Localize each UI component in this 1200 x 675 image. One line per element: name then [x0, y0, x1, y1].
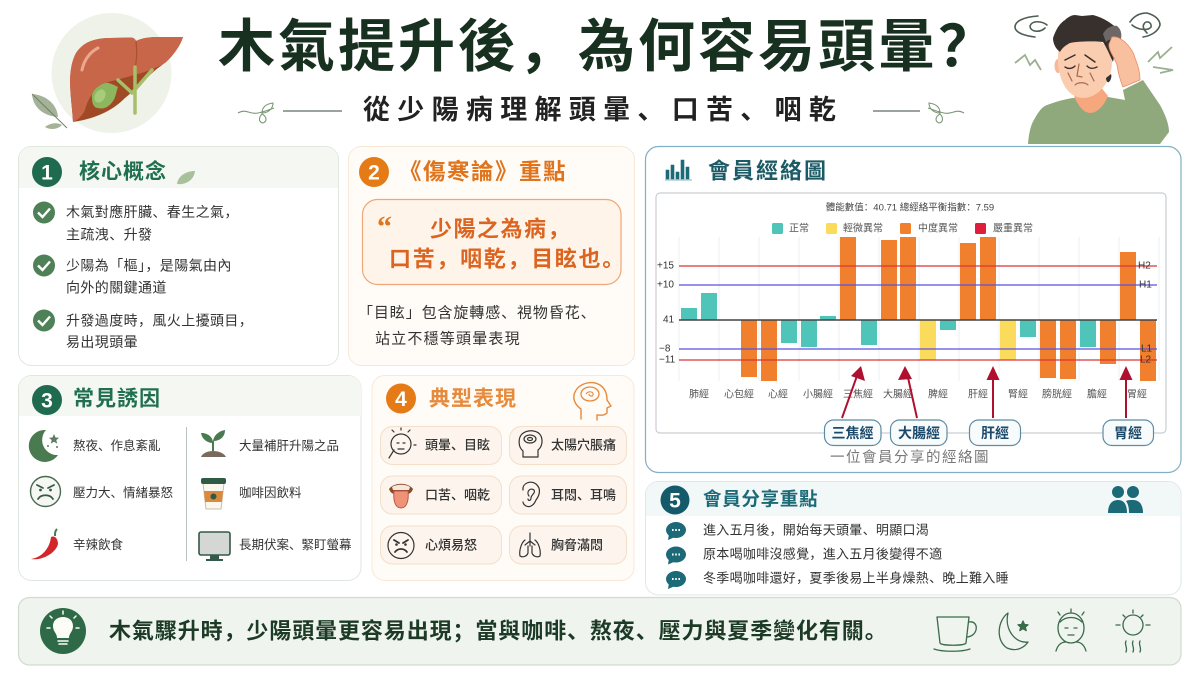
callout: stomach meridian [1103, 420, 1154, 446]
chart legend: 輕微異常 [843, 222, 883, 234]
quote box [362, 200, 626, 284]
heading: Shanghan Lun [359, 157, 567, 187]
trigger: long desk and screen time [199, 532, 352, 561]
trigger: spicy food [31, 529, 124, 559]
title: 木氣提升後，為何容易頭暈？ [218, 15, 998, 79]
point 3: 易出現頭暈 [66, 334, 138, 350]
axis labels: +10 [657, 280, 674, 290]
arrow: sanjiao meridian [842, 366, 865, 418]
note on dizziness: 「目眩」包含旋轉感、視物昏花、 [358, 304, 597, 322]
point 2 [33, 254, 232, 296]
point 1 [33, 202, 239, 242]
trigger: stress and anger [30, 476, 174, 506]
trigger: spicy food: 辛辣飲食 [73, 537, 124, 552]
panel 4: typical symptoms [372, 376, 634, 580]
axis labels: L2 [1140, 354, 1152, 366]
meridian labels: 大腸經 [883, 388, 913, 400]
heading: typical symptoms: 典型表現 [429, 388, 517, 410]
chart legend [772, 222, 1033, 234]
trigger: liver-raising tonics: 大量補肝升陽之品 [239, 439, 339, 453]
axis labels [657, 260, 1153, 366]
symptom: chest and rib tightness: 胸脅滿悶 [551, 538, 603, 552]
chart caption: 一位會員分享的經絡圖 [830, 449, 990, 466]
heading: core concept [32, 157, 195, 187]
symptom: dizziness [380, 426, 502, 464]
meridian labels: 心經 [768, 388, 788, 400]
trigger: late nights: 熬夜、作息紊亂 [73, 438, 161, 453]
meridian labels: 膽經 [1087, 388, 1107, 400]
heading: member meridian chart: 會員經絡圖 [708, 158, 828, 184]
quote box: 少陽之為病， [430, 216, 571, 242]
quote box: 口苦，咽乾，目眩也。 [389, 246, 626, 272]
share item 2: 原本喝咖啡沒感覺，進入五月後變得不適 [703, 546, 942, 562]
symptom: bitter mouth and dry throat: 口苦、咽乾 [425, 488, 490, 502]
callout: large intestine meridian: 大腸經 [898, 425, 940, 441]
symptom: dizziness: 頭暈、目眩 [425, 438, 490, 452]
meridian labels: 腎經 [1008, 388, 1028, 400]
meridian labels: 脾經 [928, 388, 948, 400]
note on dizziness: 站立不穩等頭暈表現 [375, 330, 521, 348]
meridian labels: 肺經 [689, 388, 709, 400]
meridian labels: 胃經 [1127, 388, 1147, 400]
subtitle with flourishes: 從少陽病理解頭暈、口苦、咽乾 [363, 95, 843, 125]
icon: people [1108, 486, 1143, 513]
symptom: irritability: 心煩易怒 [425, 538, 477, 552]
point 3 [33, 310, 253, 350]
heading: typical symptoms: 4 [395, 388, 407, 411]
chart legend: 正常 [789, 222, 809, 234]
share item 3: 冬季喝咖啡還好，夏季後易上半身燥熱、晚上難入睡 [703, 570, 1009, 586]
note on dizziness [358, 304, 597, 348]
axis labels: H1 [1139, 280, 1152, 290]
point 1: 木氣對應肝臟、春生之氣， [66, 204, 239, 220]
callout: liver meridian: 肝經 [981, 425, 1009, 441]
axis labels: −11 [659, 354, 676, 366]
chart legend: 中度異常 [918, 222, 958, 234]
bar chart [681, 237, 1156, 381]
symptom: ear fullness and tinnitus [510, 476, 626, 514]
heading: core concept: 1 [41, 162, 53, 184]
meridian labels: 膀胱經 [1042, 388, 1072, 400]
callout: liver meridian [970, 420, 1020, 446]
axis labels: +15 [657, 260, 674, 272]
point 2: 向外的關鍵通道 [66, 280, 167, 296]
heading: member sharing [660, 486, 818, 514]
meridian labels: 肝經 [968, 388, 988, 400]
trigger: late nights [29, 430, 161, 462]
icon: coffee cup [934, 617, 976, 651]
icon: moon and star [999, 613, 1028, 650]
chart frame [656, 193, 1166, 433]
trigger: liver-raising tonics [201, 430, 339, 457]
point 2: 少陽為「樞」，是陽氣由內 [66, 258, 232, 274]
heading: member sharing: 5 [669, 490, 681, 512]
meridian labels: 心包經 [724, 388, 754, 400]
trigger: stress and anger: 壓力大、情緒暴怒 [73, 485, 174, 500]
trigger: caffeinated drinks: 咖啡因飲料 [239, 485, 302, 500]
icon: sun and heat [1116, 610, 1150, 652]
callout: sanjiao meridian: 三焦經 [832, 425, 874, 441]
symptom: chest and rib tightness [510, 526, 626, 564]
chart summary values: 體能數值：40.71 總經絡平衡指數：7.59 [826, 202, 994, 214]
axis labels: −8 [659, 344, 671, 354]
panel 1: core concept [18, 146, 338, 366]
heading: core concept: 核心概念 [79, 160, 167, 184]
chart legend: 嚴重異常 [993, 222, 1033, 234]
callout: large intestine meridian [890, 420, 947, 446]
meridian labels: 三焦經 [843, 388, 873, 400]
heading: common triggers: 常見誘因 [73, 388, 161, 410]
threshold lines [679, 266, 1157, 360]
symptom: ear fullness and tinnitus: 耳悶、耳鳴 [551, 488, 616, 502]
arrow: liver meridian [986, 366, 1000, 418]
symptom: temple pain: 太陽穴脹痛 [551, 438, 616, 452]
trigger: long desk and screen time: 長期伏案、緊盯螢幕 [239, 537, 352, 552]
heading: common triggers: 3 [41, 390, 53, 412]
axis labels: H2 [1138, 260, 1151, 272]
bottom summary bar [18, 598, 1181, 665]
icon: head with brain [574, 383, 611, 420]
illustration: liver and gallbladder [32, 13, 183, 133]
symptom: temple pain [510, 426, 626, 464]
symptom: bitter mouth and dry throat [380, 476, 502, 514]
heading: Shanghan Lun: 《傷寒論》重點 [399, 158, 567, 184]
arrow: large intestine meridian [898, 366, 917, 418]
quote box: “ [377, 210, 392, 244]
callout: sanjiao meridian [824, 420, 881, 446]
subtitle with flourishes [238, 95, 964, 125]
panel 2: Shanghan Lun key point [348, 146, 634, 366]
meridian labels [689, 388, 1147, 400]
summary text: 木氣驟升時，少陽頭暈更容易出現；當與咖啡、熬夜、壓力與夏季變化有關。 [109, 618, 888, 644]
meridian labels: 小腸經 [803, 388, 833, 400]
panel 3: common triggers [18, 376, 361, 580]
callout: stomach meridian: 胃經 [1114, 425, 1142, 441]
heading: Shanghan Lun: 2 [368, 162, 380, 184]
heading: member sharing: 會員分享重點 [703, 488, 818, 510]
heading: common triggers [32, 385, 161, 415]
axis labels: L1 [1141, 344, 1153, 354]
heading: typical symptoms [386, 384, 517, 414]
share item 1: 進入五月後，開始每天頭暈、明顯口渴 [703, 522, 929, 538]
panel: meridian chart [646, 146, 1181, 472]
illustration: dizzy man holding head [1015, 13, 1173, 144]
symptom: irritability [380, 526, 502, 564]
icon: stressed face [1056, 609, 1086, 651]
arrow: stomach meridian [1120, 366, 1132, 418]
trigger: caffeinated drinks [201, 478, 302, 509]
panel 5: member sharing [646, 482, 1181, 595]
point 1: 主疏洩、升發 [66, 226, 152, 242]
icon: light bulb [40, 608, 86, 654]
point 3: 升發過度時，風火上擾頭目， [66, 312, 253, 328]
axis labels: 41 [663, 314, 675, 326]
